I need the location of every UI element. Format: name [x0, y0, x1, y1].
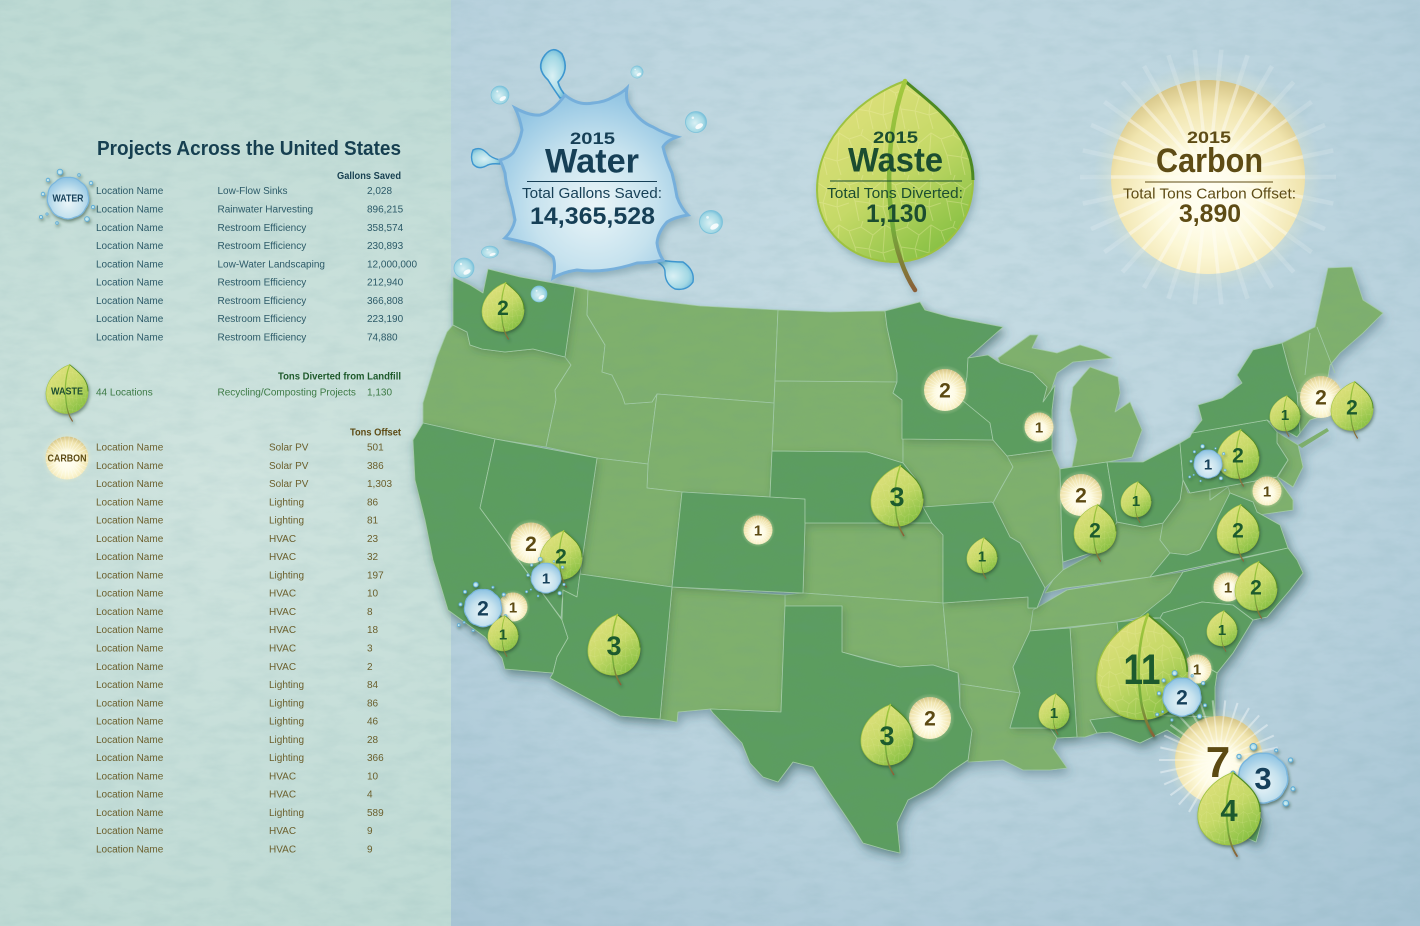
table: waste projects [96, 388, 392, 398]
table: water projects: Location Name [96, 204, 164, 216]
waste marker: North Carolina 2: 2 [1250, 576, 1262, 600]
panel: project list background [0, 0, 451, 926]
waste marker: Texas 3: 3 [879, 721, 895, 751]
table: carbon projects: Lighting [269, 717, 304, 728]
waste marker: Mississippi 1: 1 [1050, 705, 1058, 722]
callout: 2015 Carbon sun [1080, 50, 1336, 304]
waste marker: Georgia 11 [1097, 614, 1187, 736]
table: carbon projects: 386 [367, 461, 384, 472]
table: carbon projects: 23 [367, 534, 379, 545]
table: carbon projects [96, 442, 392, 856]
state: Michigan lower [1070, 367, 1142, 467]
table: carbon projects: Lighting [269, 808, 304, 819]
carbon marker: Nevada 2 [507, 519, 555, 567]
table: carbon projects: 501 [367, 442, 384, 454]
waste marker: Ohio 1: 1 [1132, 493, 1140, 510]
table: carbon projects: 10 [367, 771, 379, 782]
table: carbon projects: 86 [367, 698, 379, 709]
carbon marker: Wisconsin 1 [1022, 410, 1056, 444]
state: Mississippi [1010, 628, 1077, 738]
waste heading and total: 1,130 [866, 200, 927, 228]
table: water projects: Location Name [96, 241, 164, 252]
state: Montana [587, 290, 778, 404]
table: water projects: Restroom Efficiency [218, 223, 306, 234]
waste marker: Massachusetts 2: 2 [1346, 396, 1358, 420]
carbon marker: Indiana 2 [1056, 470, 1106, 520]
state: Arizona [550, 574, 672, 719]
table: water projects: Restroom Efficiency [218, 241, 306, 252]
table: water projects: 212,940 [367, 278, 404, 288]
state: Texas [710, 606, 972, 853]
water marker: California 2 [457, 582, 507, 632]
icon: water legend splash: WATER [52, 194, 84, 204]
state: Michigan upper [998, 335, 1112, 402]
waste marker: Virginia 2: 2 [1232, 520, 1244, 542]
waste marker: Nebraska 3 [871, 466, 923, 536]
table: carbon projects: 10 [367, 589, 379, 600]
state: Maryland and Delaware [1190, 477, 1293, 515]
state: Missouri [923, 502, 1045, 608]
waste marker: Mississippi 1 [1039, 694, 1069, 734]
state: Nevada [480, 439, 597, 618]
table: carbon projects: Location Name [96, 461, 164, 472]
dark highlighted states [413, 269, 1303, 853]
state: Kansas [803, 523, 943, 603]
heading: Projects Across the United States: Projects Across the United States [97, 137, 401, 160]
table: water projects: Restroom Efficiency [218, 314, 306, 325]
state: Washington [453, 269, 575, 357]
table header: Tons Offset: Tons Offset [350, 428, 402, 438]
state: Utah [580, 458, 682, 587]
table: carbon projects: 1,303 [367, 479, 392, 490]
state: Florida [1090, 715, 1262, 842]
table: carbon projects: Lighting [269, 516, 304, 527]
table: carbon projects: 197 [367, 570, 384, 581]
carbon marker: Georgia 1: 1 [1193, 662, 1201, 678]
waste heading and total: Total Tons Diverted: [827, 185, 963, 202]
state: Minnesota [885, 302, 1003, 440]
carbon marker: Nevada 2: 2 [525, 533, 537, 556]
state: Virginia [1150, 493, 1288, 577]
callout: 2015 Waste leaf [817, 81, 973, 290]
water marker: Nevada 1: 1 [542, 570, 550, 588]
waste marker: Washington 2: 2 [497, 297, 509, 320]
table: carbon projects: Location Name [96, 662, 164, 673]
state: Oregon [423, 325, 571, 447]
water heading and total: 14,365,528 [530, 203, 655, 230]
table: carbon projects: Location Name [96, 625, 164, 636]
table: water projects: Location Name [96, 223, 164, 234]
table header: Tons Diverted from Landfill: Tons Diverted from Landfill [278, 372, 401, 382]
carbon marker: Massachusetts 2 [1296, 372, 1346, 422]
state: California [413, 423, 568, 673]
table: water projects: 896,215 [367, 204, 404, 216]
table: carbon projects: Location Name [96, 442, 164, 454]
table: carbon projects: HVAC [269, 844, 296, 856]
table: water projects: Restroom Efficiency [218, 332, 306, 344]
table: carbon projects: Solar PV [269, 461, 309, 472]
table: carbon projects: HVAC [269, 662, 296, 673]
waste marker: Texas 3 [861, 705, 913, 775]
waste marker: North Carolina 2 [1235, 562, 1277, 618]
waste marker: Pennsylvania 2 [1217, 430, 1259, 486]
icon: water legend splash [39, 169, 95, 224]
callout: 2015 Water splash [454, 50, 722, 302]
carbon heading and total [1123, 128, 1296, 228]
state: Georgia [1117, 618, 1217, 717]
carbon marker: Indiana 2: 2 [1075, 484, 1087, 508]
table: carbon projects: HVAC [269, 644, 296, 654]
table: carbon projects: Location Name [96, 497, 164, 508]
table: carbon projects: 589 [367, 808, 384, 819]
table: carbon projects: 84 [367, 680, 379, 691]
water marker: Nevada 1 [525, 557, 565, 597]
droplets around the splash [454, 50, 722, 302]
carbon heading and total: Carbon [1156, 142, 1263, 180]
state: Tennessee [1030, 572, 1183, 631]
state: Louisiana [960, 684, 1067, 770]
waste marker: Missouri 1: 1 [978, 548, 986, 566]
icon: carbon legend sun [42, 433, 92, 483]
carbon marker: California 1: 1 [509, 600, 517, 616]
table: carbon projects: 3 [367, 644, 373, 654]
table: water projects: Low-Flow Sinks [218, 186, 288, 197]
waste heading and total: Waste [848, 142, 943, 180]
table: carbon projects: 81 [367, 516, 379, 527]
table: carbon projects: Lighting [269, 735, 304, 746]
table: water projects: Restroom Efficiency [218, 278, 306, 288]
table: carbon projects: HVAC [269, 826, 296, 837]
waste marker: Nevada 2 [540, 531, 582, 587]
carbon marker: Colorado 1 [741, 513, 775, 547]
state: Ohio [1107, 443, 1183, 527]
water marker: California 2: 2 [477, 598, 489, 620]
table: waste projects: 44 Locations [96, 388, 153, 398]
state: Arkansas [943, 597, 1037, 693]
carbon marker: Maryland 1: 1 [1263, 484, 1271, 500]
splash body [500, 88, 688, 278]
table: carbon projects: 4 [367, 790, 373, 801]
state: Wyoming [647, 394, 774, 497]
waste marker: Arizona 3 [588, 615, 640, 685]
waste marker: Connecticut 1: 1 [1281, 407, 1289, 424]
waste marker: Ohio 1 [1121, 482, 1151, 522]
waste marker: Connecticut 1 [1270, 396, 1300, 436]
carbon marker: Colorado 1: 1 [754, 522, 762, 540]
carbon marker: Florida 7 [1159, 700, 1279, 820]
table: carbon projects: Location Name [96, 570, 164, 581]
table: carbon projects: 18 [367, 625, 379, 636]
state: Indiana [1060, 462, 1117, 562]
table: water projects: Location Name [96, 314, 164, 325]
state: Long Island [1298, 428, 1329, 448]
waste marker: California 1: 1 [499, 626, 507, 644]
water marker: Georgia 2: 2 [1176, 686, 1188, 710]
table: water projects [96, 186, 417, 344]
table: carbon projects: 2 [367, 662, 373, 673]
state: West Virginia [1160, 480, 1237, 555]
waste marker: Florida 4: 4 [1220, 793, 1238, 828]
table: water projects: Location Name [96, 296, 164, 307]
table: carbon projects: Lighting [269, 680, 304, 691]
carbon marker: Minnesota 2 [920, 365, 970, 415]
state: Oklahoma [785, 593, 949, 670]
carbon heading and total: 2015 [1187, 128, 1231, 147]
table: water projects: Location Name [96, 186, 164, 197]
table: carbon projects: Location Name [96, 552, 164, 563]
water marker: Georgia 2 [1156, 671, 1207, 721]
carbon marker: North Carolina 1: 1 [1224, 580, 1232, 596]
table: carbon projects: HVAC [269, 625, 296, 636]
state: South Carolina [1160, 602, 1253, 673]
big leaf [817, 81, 973, 290]
state: New Jersey [1277, 432, 1303, 487]
waste marker: Arizona 3: 3 [606, 631, 622, 661]
table: waste projects: Recycling/Composting Projects [218, 388, 356, 398]
waste marker: Pennsylvania 2: 2 [1232, 444, 1244, 468]
waste heading and total: 2015 [873, 128, 918, 147]
water marker: Pennsylvania 1 [1189, 444, 1226, 482]
table: carbon projects: Location Name [96, 826, 164, 837]
state: Illinois [993, 450, 1063, 588]
table: carbon projects: Location Name [96, 644, 164, 654]
table: carbon projects: Location Name [96, 680, 164, 691]
water heading and total: 2015 [570, 129, 615, 148]
table: carbon projects: HVAC [269, 589, 296, 600]
table: carbon projects: 366 [367, 753, 384, 764]
waste marker: South Carolina 1: 1 [1218, 622, 1226, 639]
panel: table of projects [39, 137, 417, 856]
table: carbon projects: 28 [367, 735, 379, 746]
table: carbon projects: HVAC [269, 534, 296, 545]
state: Kentucky [1045, 522, 1170, 593]
table: carbon projects: Lighting [269, 698, 304, 709]
state: South Dakota [772, 381, 903, 463]
carbon marker: Massachusetts 2: 2 [1315, 386, 1327, 410]
table: carbon projects: Location Name [96, 735, 164, 746]
waste marker: South Carolina 1 [1207, 611, 1237, 651]
carbon marker: Texas 2 [905, 693, 955, 743]
table: waste projects: 1,130 [367, 388, 392, 398]
state: Alabama [1070, 622, 1128, 737]
map markers [457, 283, 1373, 856]
table: water projects: Rainwater Harvesting [218, 204, 313, 216]
map of the United States [413, 267, 1383, 853]
carbon marker: Georgia 1 [1180, 652, 1214, 686]
table: carbon projects: Location Name [96, 516, 164, 527]
table: water projects: Location Name [96, 260, 164, 270]
table header: Gallons Saved: Gallons Saved [337, 171, 401, 182]
table: carbon projects: Location Name [96, 753, 164, 764]
table: carbon projects: Solar PV [269, 442, 309, 454]
waste heading and total [827, 128, 963, 228]
waste marker: Indiana 2 [1074, 505, 1116, 561]
table: carbon projects: Location Name [96, 790, 164, 801]
water marker: Pennsylvania 1: 1 [1204, 456, 1212, 474]
table: water projects: 358,574 [367, 223, 404, 234]
table: carbon projects: HVAC [269, 607, 296, 618]
table: carbon projects: HVAC [269, 790, 296, 801]
table: water projects: 223,190 [367, 314, 404, 325]
table: carbon projects: Location Name [96, 844, 164, 856]
waste marker: Indiana 2: 2 [1089, 520, 1101, 542]
table: carbon projects: 86 [367, 497, 379, 508]
waste marker: Massachusetts 2 [1331, 382, 1373, 438]
waste marker: Georgia 11: 11 [1124, 646, 1160, 694]
carbon marker: Wisconsin 1: 1 [1035, 420, 1043, 436]
table: carbon projects: Location Name [96, 607, 164, 618]
table: carbon projects: Lighting [269, 753, 304, 764]
table: carbon projects: Location Name [96, 698, 164, 709]
state: Idaho [546, 287, 657, 464]
state: North Dakota [775, 310, 897, 382]
table: carbon projects: 8 [367, 607, 373, 618]
table: carbon projects: Location Name [96, 589, 164, 600]
state: Nebraska [770, 451, 935, 523]
table: carbon projects: Location Name [96, 717, 164, 728]
waste marker: Washington 2 [482, 283, 524, 339]
water heading and total [522, 129, 662, 230]
table: carbon projects: HVAC [269, 771, 296, 782]
carbon heading and total: Total Tons Carbon Offset: [1123, 186, 1296, 202]
table: carbon projects: 9 [367, 844, 373, 856]
waste marker: California 1 [488, 616, 518, 656]
table: water projects: 74,880 [367, 332, 398, 344]
table: water projects: Restroom Efficiency [218, 296, 306, 307]
table: water projects: Location Name [96, 332, 164, 344]
table: carbon projects: Location Name [96, 479, 164, 490]
table: water projects: Low-Water Landscaping [218, 260, 325, 270]
state: New Mexico [660, 587, 785, 722]
table: carbon projects: Solar PV [269, 479, 309, 490]
state: New England [1282, 267, 1383, 433]
table: carbon projects: Lighting [269, 570, 304, 581]
water heading and total: Total Gallons Saved: [522, 185, 662, 202]
waste marker: Missouri 1 [967, 538, 997, 578]
waste marker: Nebraska 3: 3 [889, 482, 905, 512]
faint outer rays [1080, 50, 1336, 304]
carbon marker: North Carolina 1 [1211, 570, 1245, 604]
table: water projects: Location Name [96, 278, 164, 288]
carbon marker: California 1 [496, 590, 530, 624]
table: water projects: 12,000,000 [367, 260, 417, 270]
table: carbon projects: 9 [367, 826, 373, 837]
carbon marker: Texas 2: 2 [924, 708, 936, 730]
table: carbon projects: Location Name [96, 771, 164, 782]
table: carbon projects: Location Name [96, 534, 164, 545]
state: North Carolina [1140, 548, 1303, 620]
icon: waste legend leaf: WASTE [51, 386, 83, 398]
state: Colorado [672, 492, 805, 593]
state: Wisconsin [962, 355, 1055, 456]
carbon heading and total: 3,890 [1179, 200, 1241, 228]
state: Iowa [903, 433, 1013, 507]
table: carbon projects: HVAC [269, 552, 296, 563]
table: carbon projects: 46 [367, 717, 379, 728]
water marker: Florida 3: 3 [1254, 761, 1272, 796]
table: carbon projects: Location Name [96, 808, 164, 819]
state: New York [1192, 343, 1300, 437]
icon: waste legend leaf [46, 365, 88, 421]
water marker: Florida 3 [1229, 743, 1295, 810]
table: carbon projects: 32 [367, 552, 379, 563]
table: water projects: 2,028 [367, 186, 392, 197]
water heading and total: Water [545, 142, 639, 180]
table: water projects: 230,893 [367, 241, 404, 252]
waste marker: Florida 4 [1198, 772, 1260, 856]
carbon marker: Florida 7: 7 [1206, 738, 1230, 787]
table: water projects: 366,808 [367, 296, 404, 307]
carbon marker: Maryland 1 [1250, 474, 1284, 508]
waste marker: Nevada 2: 2 [555, 546, 567, 568]
icon: carbon legend sun: CARBON [48, 454, 86, 464]
table: carbon projects: Lighting [269, 497, 304, 508]
state: Pennsylvania [1180, 420, 1288, 493]
carbon marker: Minnesota 2: 2 [939, 380, 951, 402]
big sun [1094, 63, 1322, 291]
waste marker: Virginia 2 [1217, 505, 1259, 561]
